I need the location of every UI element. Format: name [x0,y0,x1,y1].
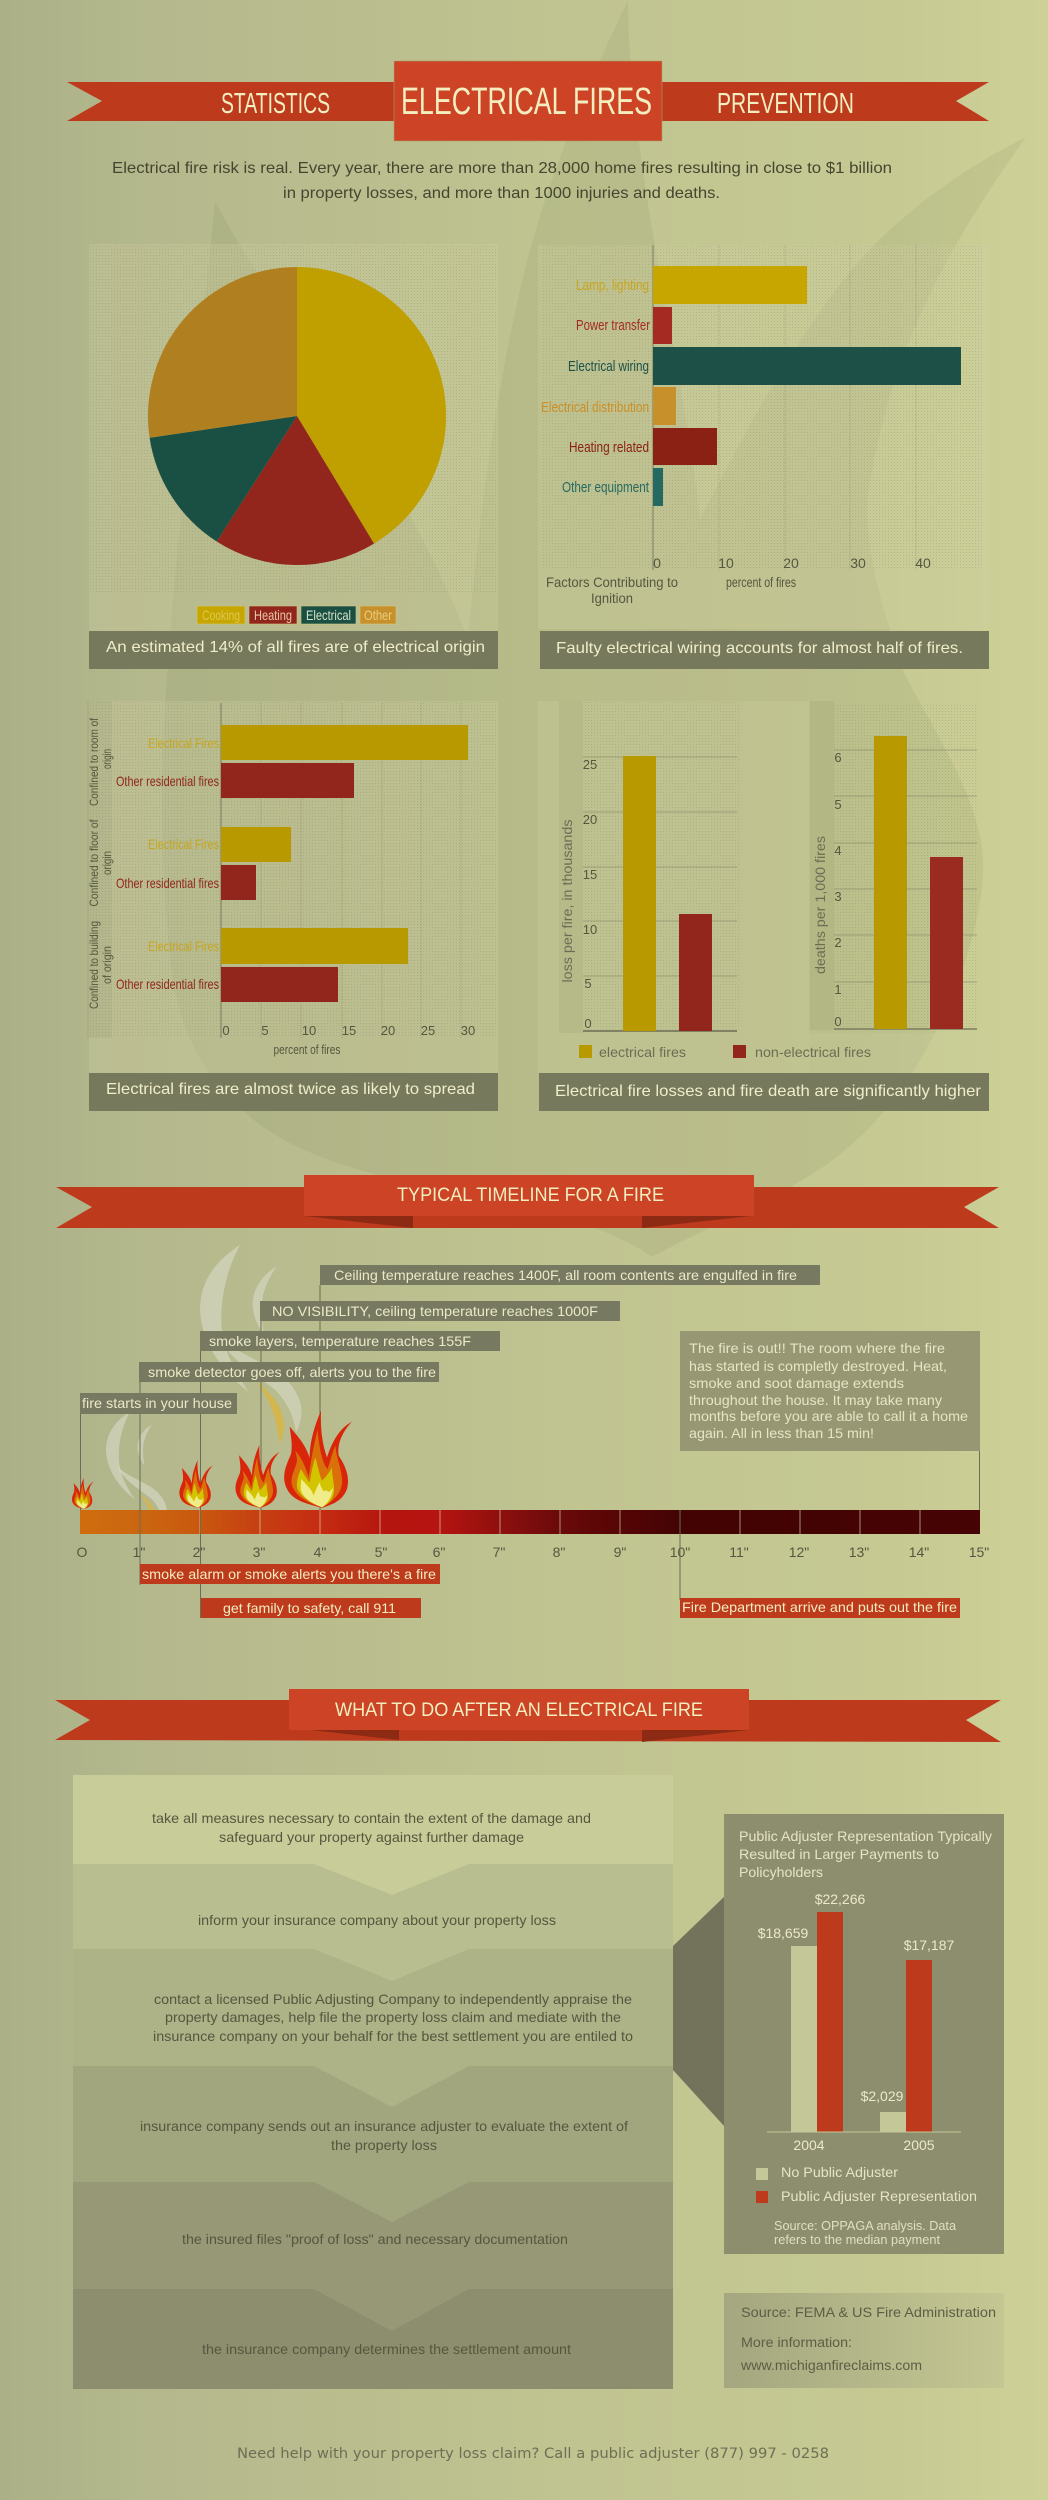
axis labels: 20 [381,1023,395,1038]
heading ribbon: timeline [56,1175,999,1228]
chart legend: No Public Adjuster [781,2164,898,2180]
chart: loss per fire: 5 [584,976,592,991]
pie legend: Heating [254,607,292,623]
callout: the fire is out: months before you are able to call it a home [689,1408,968,1424]
chart title [739,1828,992,1880]
panel: steps after a fire [73,1775,673,2389]
ribbon [67,82,989,121]
chart: deaths per 1,000 fires: 3 [834,889,842,904]
icon: flame 1 [72,1478,94,1509]
time axis labels: 7" [493,1544,505,1560]
time axis labels: 3" [253,1544,265,1560]
column chart: 2005 [903,2137,935,2153]
time axis labels: 12" [789,1544,809,1560]
step 1 [73,1775,673,1864]
caption: An estimated 14% of all fires are of electrical origin [106,639,485,656]
time axis labels: 14" [909,1544,929,1560]
intro text [112,160,892,202]
smoke: upper [200,1245,301,1444]
axis labels: 0 [653,555,661,571]
axis labels: 30 [850,555,866,571]
pie legend: Other [364,607,392,623]
upper event labels: smoke detector goes off, alerts you to the fire [148,1364,436,1380]
caption: Faulty electrical wiring accounts for almost half of fires. [556,640,963,657]
chart source [774,2219,956,2247]
step 4 [73,2066,673,2182]
heading ribbon: timeline: TYPICAL TIMELINE FOR A FIRE [397,1185,664,1206]
bar labels: Electrical Fires [148,836,219,852]
axis labels: 30 [461,1023,475,1038]
callout: the fire is out: The fire is out!! The room where the fire [689,1340,945,1356]
step 3 [73,1949,673,2066]
horizontal bars [653,266,961,506]
axis labels: percent of fires [274,1042,341,1057]
step 1: safeguard your property against further damage [219,1829,524,1845]
column chart: $2,029 [861,2088,904,2104]
time axis labels [77,1544,989,1560]
bar labels: Electrical distribution [541,399,649,416]
bar labels: Electrical wiring [568,358,649,375]
group labels: origin [100,851,114,875]
smoke: lower [106,1412,167,1531]
chart: loss per fire: loss per fire, in thousands [559,820,575,982]
bar labels: Power transfer [576,317,650,334]
time axis labels: 10" [670,1544,690,1560]
legend: non-electrical fires [755,1044,871,1060]
time axis labels: 5" [375,1544,387,1560]
group labels: of origin [100,946,114,984]
bar labels: Other residential fires [116,773,219,789]
bar labels: Electrical Fires [148,735,219,751]
ribbon centre plate [394,61,662,141]
time axis labels: 15" [969,1544,989,1560]
group labels: Confined to room of [87,717,101,806]
axis labels: 20 [783,555,799,571]
step 6 [73,2289,673,2389]
group labels: origin [100,749,114,769]
chart: loss per fire: 20 [583,812,597,827]
column chart [758,1891,961,2153]
time axis labels: 1" [133,1544,145,1560]
pie legend: Electrical [306,607,351,623]
time axis labels: O [77,1544,88,1560]
axis labels [222,1023,475,1057]
chart title: Resulted in Larger Payments to [739,1846,939,1862]
time axis labels: 9" [614,1544,626,1560]
chart source: Source: OPPAGA analysis. Data [774,2219,956,2233]
icon: flame 2 [179,1460,213,1508]
lower action labels: smoke alarm or smoke alerts you there's a fire [142,1566,436,1582]
caption [89,1073,498,1111]
column chart: $22,266 [815,1891,866,1907]
heading ribbon: what to do [55,1689,1001,1742]
panel: public adjuster chart [724,1814,1004,2254]
column chart: $17,187 [904,1937,955,1953]
bar labels [541,277,650,496]
icon: flame 3 [235,1445,279,1508]
panel: sources: www.michiganfireclaims.com [740,2358,922,2373]
chart: deaths per 1,000 fires [812,736,977,1029]
icon: flame 4 [284,1411,352,1508]
bar labels [116,735,219,992]
panel: fire spread chart [87,701,498,1111]
chart: deaths per 1,000 fires: 4 [834,843,842,858]
bar labels: Other residential fires [116,875,219,891]
chart: deaths per 1,000 fires: deaths per 1,000 fires [812,836,828,974]
chart: loss per fire: 0 [584,1016,592,1031]
chart: loss per fire [559,756,737,1031]
axis labels: percent of fires [726,574,796,590]
upper event labels: NO VISIBILITY, ceiling temperature reaches 1000F [272,1303,598,1319]
step 2 [73,1864,673,1949]
callout: the fire is out: throughout the house. It may take many [689,1392,942,1408]
bar labels: Electrical Fires [148,938,219,954]
heading ribbon: what to do: WHAT TO DO AFTER AN ELECTRICAL FIRE [335,1700,703,1721]
panel: sources: More information: [741,2335,852,2350]
chart: loss per fire: 10 [583,922,597,937]
upper event labels [80,1265,820,1414]
upper event labels: Ceiling temperature reaches 1400F, all room contents are engulfed in fire [334,1267,797,1283]
step 4: the property loss [331,2137,437,2153]
chart: deaths per 1,000 fires: 1 [834,982,842,997]
chart: deaths per 1,000 fires: 2 [834,935,842,950]
lower action labels: get family to safety, call 911 [223,1600,396,1616]
time axis labels: 13" [849,1544,869,1560]
pie chart [148,267,446,565]
step 2: inform your insurance company about your property loss [198,1912,556,1928]
group labels: Confined to floor of [87,819,101,906]
header banner [67,61,989,141]
axis labels: 5 [261,1023,269,1038]
bar labels: Lamp, lighting [576,277,649,294]
step 4: insurance company sends out an insurance adjuster to evaluate the extent of [140,2118,628,2134]
bar labels: Other equipment [562,479,650,496]
heading: statistics: STATISTICS [221,88,330,120]
axis labels [546,555,931,606]
axis labels: 0 [222,1023,230,1038]
bar labels: Heating related [569,439,649,456]
legend: electrical fires [599,1044,686,1060]
panel: factors contributing to ignition [538,245,989,669]
axis labels: 25 [421,1023,435,1038]
axis labels: 10 [718,555,734,571]
step 6: the insurance company determines the settlement amount [202,2341,571,2357]
panel: timeline [72,1245,989,1618]
upper event labels: smoke layers, temperature reaches 155F [209,1333,471,1349]
callout: the fire is out: has started is completly destroyed. Heat, [689,1358,947,1374]
pie legend [197,606,396,624]
step 5: the insured files "proof of loss" and necessary documentation [182,2231,568,2247]
column chart: $18,659 [758,1925,809,1941]
chart: loss per fire: 15 [583,867,597,882]
axis labels: Ignition [591,590,633,606]
time axis labels: 4" [314,1544,326,1560]
axis labels: Factors Contributing to [546,574,678,590]
connector between steps and chart [673,1896,725,2127]
chart: deaths per 1,000 fires: 0 [834,1014,842,1029]
title: ELECTRICAL FIRES [401,81,652,123]
upper event labels: fire starts in your house [82,1395,232,1411]
panel: losses and deaths charts [538,701,989,1111]
group labels: Confined to building [87,921,101,1009]
axis labels: 10 [302,1023,316,1038]
axis labels: 15 [342,1023,356,1038]
caption [540,631,989,669]
step 3: property damages, help file the property loss claim and mediate with the [165,2009,621,2025]
callout: the fire is out [680,1331,980,1451]
legend [579,1044,871,1060]
lower action labels [140,1564,960,1618]
panel: sources: Source: FEMA & US Fire Administration [741,2305,996,2320]
footer call to action: Need help with your property loss claim? Call a public adjuster (877) 997 - 0258 [237,2446,829,2462]
lower action labels: Fire Department arrive and puts out the fire [682,1599,957,1615]
time axis labels: 11" [729,1544,749,1560]
chart: deaths per 1,000 fires: 6 [834,750,842,765]
timeline bar [80,1510,980,1534]
caption: Electrical fire losses and fire death are significantly higher [555,1083,982,1100]
time axis labels: 8" [553,1544,565,1560]
axis labels: 40 [915,555,931,571]
chart: loss per fire: 25 [583,757,597,772]
time axis labels: 6" [433,1544,445,1560]
callout: the fire is out: smoke and soot damage extends [689,1375,904,1391]
panel: sources [724,2293,1004,2388]
chart: deaths per 1,000 fires: 5 [834,797,842,812]
intro text: in property losses, and more than 1000 injuries and deaths. [283,185,720,202]
chart title: Policyholders [739,1864,823,1880]
bar labels: Other residential fires [116,976,219,992]
intro text: Electrical fire risk is real. Every year, there are more than 28,000 home fires resulting in close to $1 billion [112,160,892,177]
caption [89,631,498,669]
chart legend: Public Adjuster Representation [781,2188,977,2204]
heading: prevention: PREVENTION [717,88,854,120]
step 1: take all measures necessary to contain the extent of the damage and [152,1810,591,1826]
chart legend [756,2164,977,2204]
caption: Electrical fires are almost twice as likely to spread [106,1081,475,1098]
chart source: refers to the median payment [774,2233,941,2247]
column chart: 2004 [793,2137,825,2153]
step 5 [73,2182,673,2289]
time axis labels: 2" [193,1544,205,1560]
group labels [87,717,114,1009]
callout: the fire is out: again. All in less than 15 min! [689,1425,874,1441]
panel: pie chart [89,244,498,669]
chart title: Public Adjuster Representation Typically [739,1828,992,1844]
pie legend: Cooking [202,607,240,623]
horizontal bars [221,725,468,1002]
caption [539,1073,989,1111]
step 3: contact a licensed Public Adjusting Company to independently appraise the [154,1991,632,2007]
step 3: insurance company on your behalf for the best settlement you are entiled to [153,2028,633,2044]
